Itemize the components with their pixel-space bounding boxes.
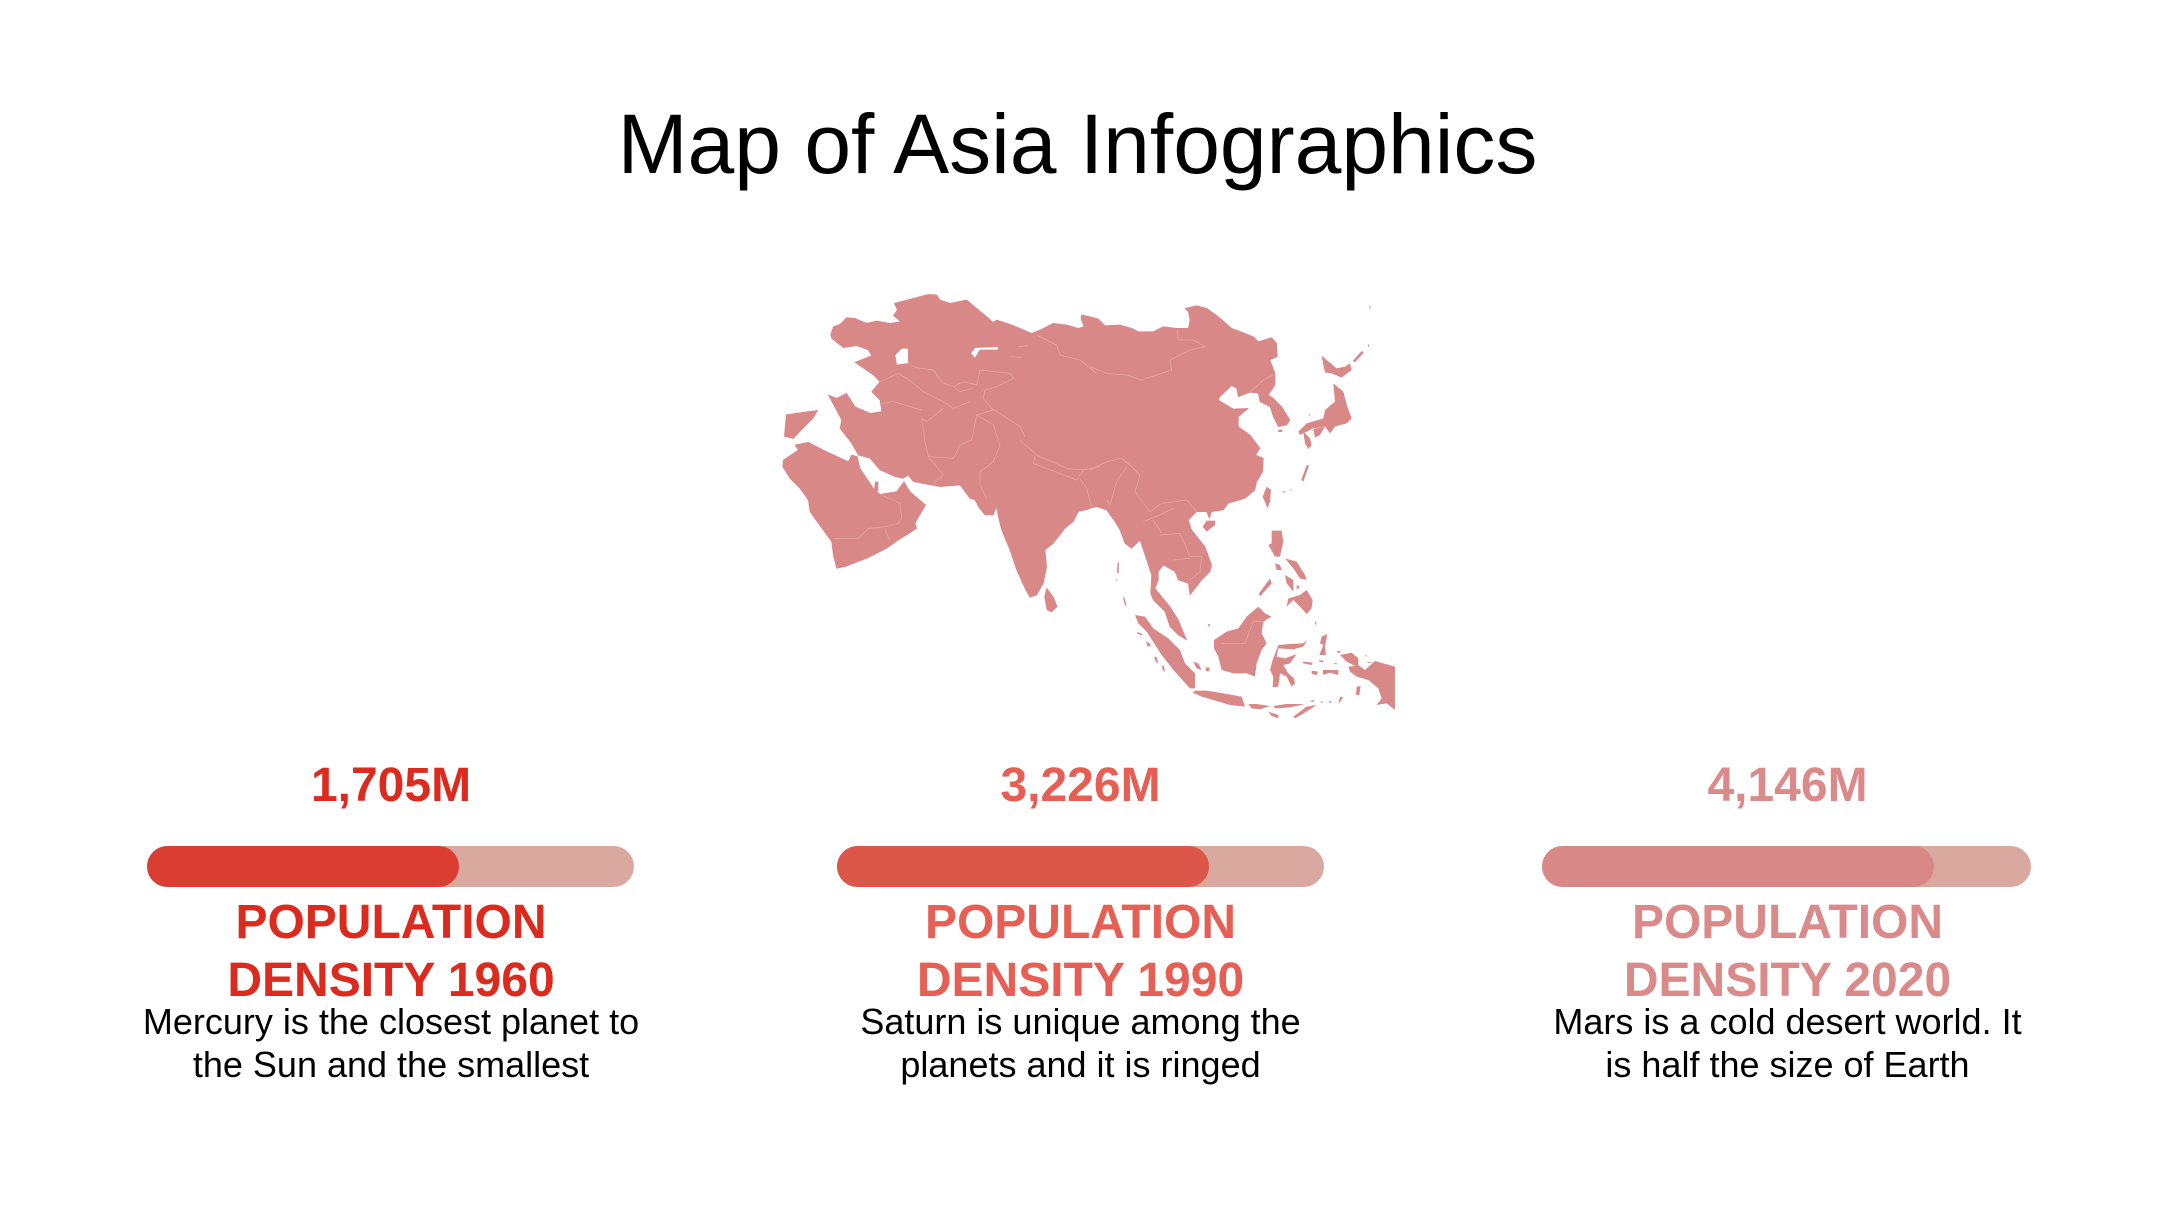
description 1960: Mercury is the closest planet to — [143, 1000, 639, 1042]
country borders — [833, 330, 1273, 643]
description 1960 — [143, 1000, 639, 1084]
label 1990: POPULATION — [925, 896, 1236, 948]
description 1990 — [860, 1000, 1301, 1084]
label 1990 — [917, 896, 1244, 1006]
label 1960: POPULATION — [235, 896, 547, 948]
description 2020 — [1553, 1000, 2022, 1084]
description 1990: Saturn is unique among the — [860, 1000, 1301, 1042]
description 1990: planets and it is ringed — [900, 1044, 1261, 1084]
value 2020: 4,146M — [1707, 759, 1868, 812]
Southeast Asian islands — [1116, 521, 1395, 718]
stat column: 1960 — [143, 759, 639, 1084]
description 1960: the Sun and the smallest — [193, 1044, 589, 1084]
label 2020: DENSITY 2020 — [1624, 954, 1951, 1006]
label 1960 — [227, 896, 555, 1006]
mainland Asia — [828, 294, 1290, 640]
label 2020 — [1624, 896, 1951, 1006]
description 2020: Mars is a cold desert world. It — [1553, 1000, 2022, 1042]
label 1990: DENSITY 1990 — [917, 954, 1244, 1006]
progress bar 1990 — [837, 846, 1324, 887]
Arabian peninsula — [783, 442, 926, 568]
title: Map of Asia Infographics — [618, 97, 1537, 191]
progress bar 2020 — [1542, 846, 2031, 887]
label 1960: DENSITY 1960 — [227, 954, 555, 1006]
stat column: 1990 — [837, 759, 1324, 1084]
value 1960: 1,705M — [311, 759, 471, 812]
Iraq and Syria — [784, 410, 818, 439]
value 1990: 3,226M — [1000, 759, 1161, 812]
label 2020: POPULATION — [1632, 896, 1943, 948]
description 2020: is half the size of Earth — [1605, 1044, 1970, 1084]
East Asian islands — [1263, 306, 1371, 508]
stat column: 2020 — [1542, 759, 2031, 1084]
Qatar, Sri Lanka — [874, 482, 1058, 612]
progress bar 1960 — [147, 846, 634, 887]
